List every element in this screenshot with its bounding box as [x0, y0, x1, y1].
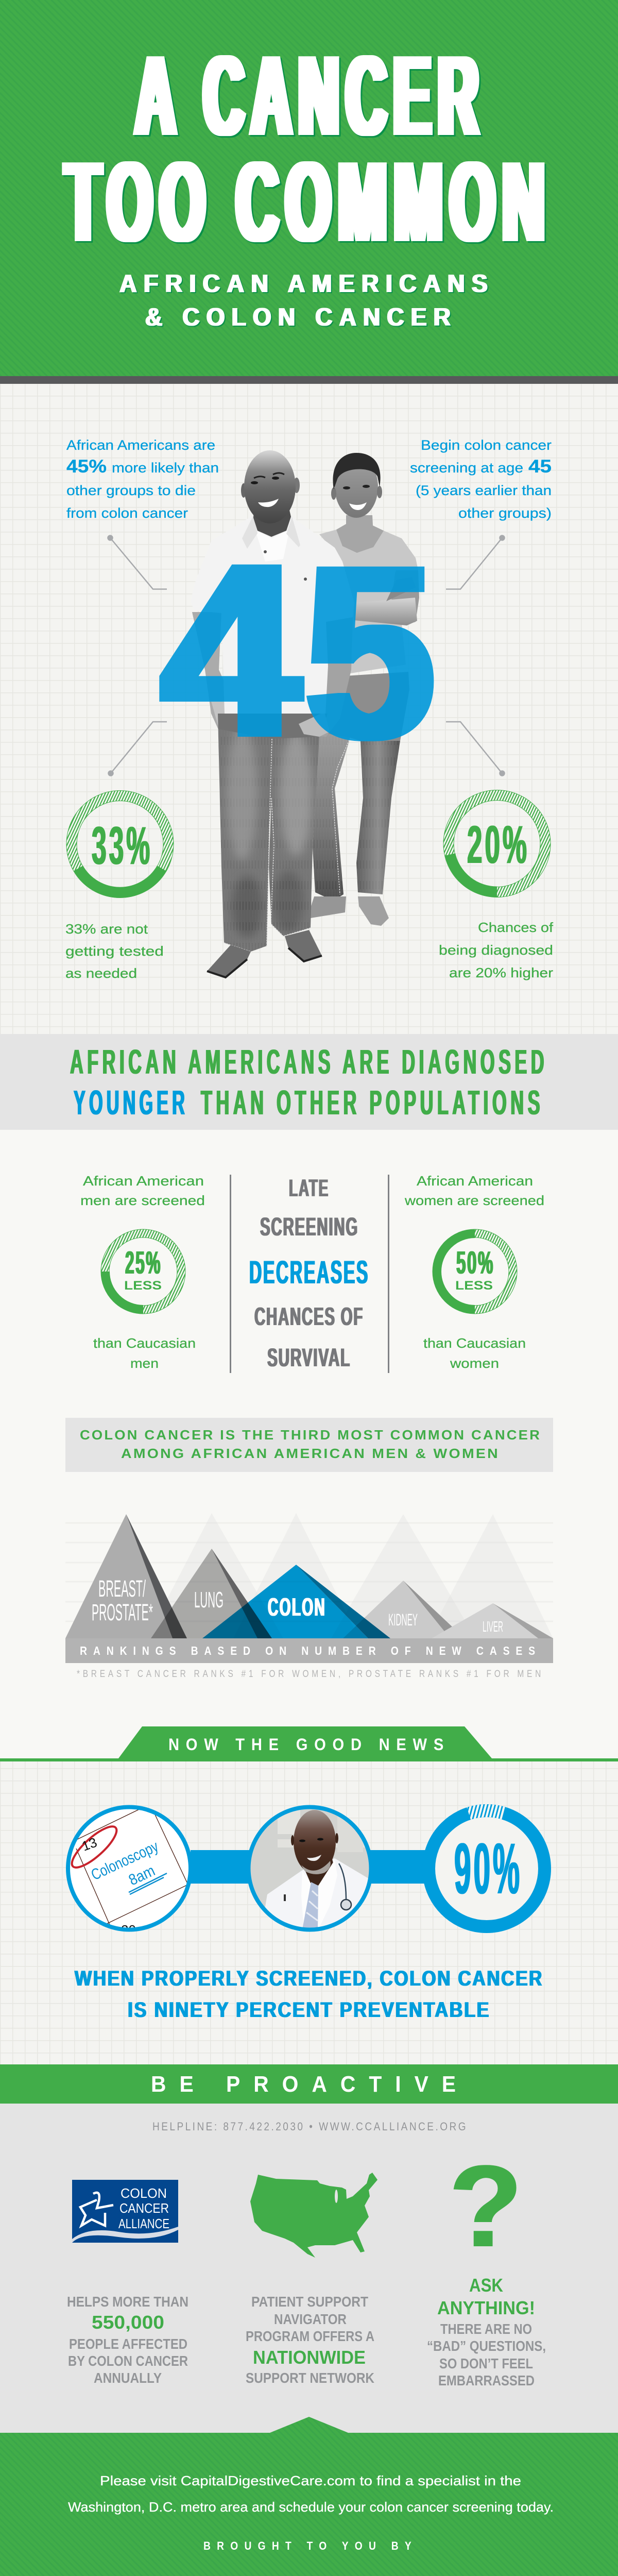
chart base caption: [65, 1638, 553, 1663]
central statement: LATE: [289, 1174, 329, 1201]
callout: begin screening at 45: other groups): [458, 505, 552, 521]
icon: calendar appointment: 8am: [126, 1862, 158, 1889]
callout: begin screening at 45: (5 years earlier than: [416, 483, 552, 498]
callout: 45 percent more likely: other groups to die: [66, 483, 196, 498]
chart base caption: RANKINGS BASED ON NUMBER OF NEW CASES: [80, 1644, 541, 1657]
logo: colon cancer alliance: [72, 2180, 178, 2243]
panel: prevention: [0, 1761, 618, 2064]
heading: diagnosed younger: YOUNGER: [74, 1083, 188, 1122]
donut: 90 percent: 90%: [454, 1828, 522, 1909]
column: women screened: women: [450, 1355, 499, 1371]
column: nationwide network: PROGRAM OFFERS A: [246, 2328, 374, 2344]
footer: [0, 2417, 618, 2576]
peak: lung: LUNG: [194, 1587, 224, 1613]
logo: colon cancer alliance: ALLIANCE: [118, 2216, 169, 2231]
column: women screened: [404, 1173, 544, 1371]
column: women screened: than Caucasian: [423, 1335, 526, 1351]
woman: [309, 453, 419, 926]
column: men screened: men: [130, 1355, 159, 1371]
column: ask anything: EMBARRASSED: [438, 2372, 535, 2388]
column: men screened: than Caucasian: [93, 1335, 196, 1351]
tab: now the good news: NOW THE GOOD NEWS: [168, 1735, 450, 1754]
column: nationwide network: SUPPORT NETWORK: [246, 2370, 374, 2386]
callout: 45 percent more likely: from colon cancer: [66, 505, 188, 521]
call to action: Washington, D.C. metro area and schedule your colon cancer screening today.: [68, 2499, 554, 2515]
peak: colon: COLON: [268, 1594, 326, 1621]
call to action: [68, 2473, 554, 2515]
central statement: [249, 1174, 369, 1372]
column: men screened: [80, 1173, 205, 1371]
donut: 20 percent: 20%: [467, 815, 529, 875]
header band: [0, 0, 618, 384]
column: 550,000 people: ANNUALLY: [94, 2370, 162, 2386]
donut: 50 percent less: 50%: [456, 1245, 494, 1281]
donut: 33 percent: 33%: [92, 816, 152, 876]
icon: calendar appointment: [66, 1807, 191, 1938]
icon: calendar appointment: Colonoscopy: [89, 1838, 161, 1884]
peak: kidney: KIDNEY: [388, 1611, 418, 1629]
peak: breast prostate: PROSTATE*: [92, 1599, 153, 1625]
icon: US map: [250, 2173, 377, 2258]
column: 550,000 people: HELPS MORE THAN: [67, 2294, 188, 2310]
brought to you by: BROUGHT TO YOU BY: [203, 2539, 418, 2552]
callout: begin screening at 45: [410, 437, 552, 521]
callout: 45 percent more likely: more likely than: [112, 460, 219, 476]
text: 33 percent not tested: 33% are not: [65, 921, 148, 937]
big number 45: [161, 510, 435, 792]
callout: 45 percent more likely: African Americans are: [66, 437, 215, 453]
text: chances of diagnosis: [439, 920, 554, 980]
callout: 45 percent more likely: 45%: [66, 456, 107, 477]
subtitle: & COLON CANCER: [145, 303, 457, 331]
callout box: third most common: [65, 1418, 553, 1472]
text: 33 percent not tested: getting tested: [65, 943, 164, 959]
man: [191, 450, 354, 977]
donut: 33 percent: [66, 790, 174, 897]
connector bar: [191, 1850, 427, 1884]
column: men screened: men are screened: [80, 1193, 205, 1208]
column: 550,000 people: BY COLON CANCER: [68, 2353, 188, 2369]
callout: 45 percent more likely: [66, 437, 219, 521]
column: nationwide network: [246, 2294, 374, 2386]
callout box: third most common: COLON CANCER IS THE THIRD MOST COMMON CANCER: [80, 1427, 541, 1443]
column: 550,000 people: [67, 2294, 188, 2386]
donut: 20 percent: [443, 790, 551, 897]
column: women screened: African American: [417, 1173, 533, 1189]
tab: now the good news: [0, 1726, 618, 1761]
column: 550,000 people: 550,000: [92, 2312, 164, 2333]
ghost peaks: [147, 1513, 553, 1638]
dividers: [230, 1175, 389, 1373]
icon: question mark: ?: [449, 2141, 522, 2271]
central statement: CHANCES OF: [254, 1303, 364, 1331]
band: be proactive: [0, 2064, 618, 2104]
photo: doctor: [248, 1806, 373, 1937]
icon: calendar appointment: 20: [121, 1922, 136, 1938]
statement: ninety percent preventable: WHEN PROPERLY SCREENED, COLON CANCER: [75, 1966, 543, 1990]
column: ask anything: SO DON’T FEEL: [439, 2355, 533, 2371]
statement: ninety percent preventable: IS NINETY PERCENT PREVENTABLE: [128, 1997, 490, 2022]
column: ask anything: [427, 2275, 546, 2388]
logo: colon cancer alliance: COLON: [121, 2185, 167, 2201]
peak: lung: [151, 1549, 272, 1638]
column: 550,000 people: PEOPLE AFFECTED: [69, 2336, 187, 2352]
heading: diagnosed younger: [0, 1034, 618, 1130]
central statement: SCREENING: [260, 1212, 358, 1241]
leader lines: [108, 536, 505, 776]
donut: 25 percent less: [101, 1229, 185, 1314]
peak: liver: [432, 1603, 553, 1638]
statement: ninety percent preventable: [75, 1966, 543, 2022]
text: 33 percent not tested: [65, 921, 164, 981]
column: nationwide network: NAVIGATOR: [274, 2311, 347, 2327]
logo: colon cancer alliance: CANCER: [119, 2200, 169, 2216]
column: men screened: African American: [83, 1173, 204, 1189]
text: 33 percent not tested: as needed: [65, 965, 137, 981]
photo: couple: [191, 450, 419, 977]
icon: calendar appointment: 13: [80, 1835, 99, 1854]
title: [65, 32, 552, 266]
column: nationwide network: NATIONWIDE: [253, 2347, 366, 2368]
column: ask anything: ANYTHING!: [437, 2297, 535, 2318]
text: chances of diagnosis: are 20% higher: [449, 965, 553, 980]
column: women screened: women are screened: [404, 1193, 544, 1208]
panel: resources: [0, 2104, 618, 2433]
callout: begin screening at 45: Begin colon cancer: [421, 437, 552, 453]
peak: colon: [202, 1565, 390, 1638]
column: ask anything: THERE ARE NO: [440, 2321, 532, 2337]
callout: begin screening at 45: 45: [528, 456, 552, 477]
donut: 25 percent less: LESS: [124, 1279, 162, 1293]
helpline: HELPLINE: 877.422.2030 • WWW.CCALLIANCE.ORG: [152, 2120, 468, 2133]
donut: 50 percent less: LESS: [455, 1279, 493, 1293]
peak: breast prostate: BREAST/: [98, 1575, 146, 1602]
panel: hero with couple and 45: [0, 384, 618, 1034]
mountain chart: cancer rankings: [65, 1513, 553, 1680]
column: nationwide network: PATIENT SUPPORT: [251, 2294, 368, 2310]
column: ask anything: “BAD” QUESTIONS,: [427, 2338, 546, 2354]
big number 45: 5: [305, 512, 435, 792]
central statement: SURVIVAL: [267, 1343, 351, 1372]
big number 45: 4: [161, 510, 302, 790]
donut: 90 percent: [428, 1810, 545, 1927]
subtitle: AFRICAN AMERICANS: [119, 270, 494, 298]
text: chances of diagnosis: being diagnosed: [439, 942, 553, 958]
column: ask anything: ASK: [469, 2275, 503, 2296]
callout: begin screening at 45: screening at age: [410, 460, 523, 476]
callout box: third most common: AMONG AFRICAN AMERICAN MEN & WOMEN: [121, 1446, 500, 1461]
text: chances of diagnosis: Chances of: [478, 920, 554, 935]
call to action: Please visit CapitalDigestiveCare.com to find a specialist in the: [100, 2473, 521, 2488]
donut: 25 percent less: 25%: [125, 1245, 162, 1281]
peak: liver: LIVER: [483, 1619, 503, 1635]
subtitle: [119, 270, 494, 331]
central statement: DECREASES: [249, 1255, 369, 1291]
panel: screening comparison: [0, 1130, 618, 1758]
peak: kidney: [343, 1581, 465, 1638]
band: be proactive: BE PROACTIVE: [151, 2072, 469, 2097]
peak: breast prostate: [65, 1514, 187, 1638]
donut: 50 percent less: [433, 1229, 517, 1314]
